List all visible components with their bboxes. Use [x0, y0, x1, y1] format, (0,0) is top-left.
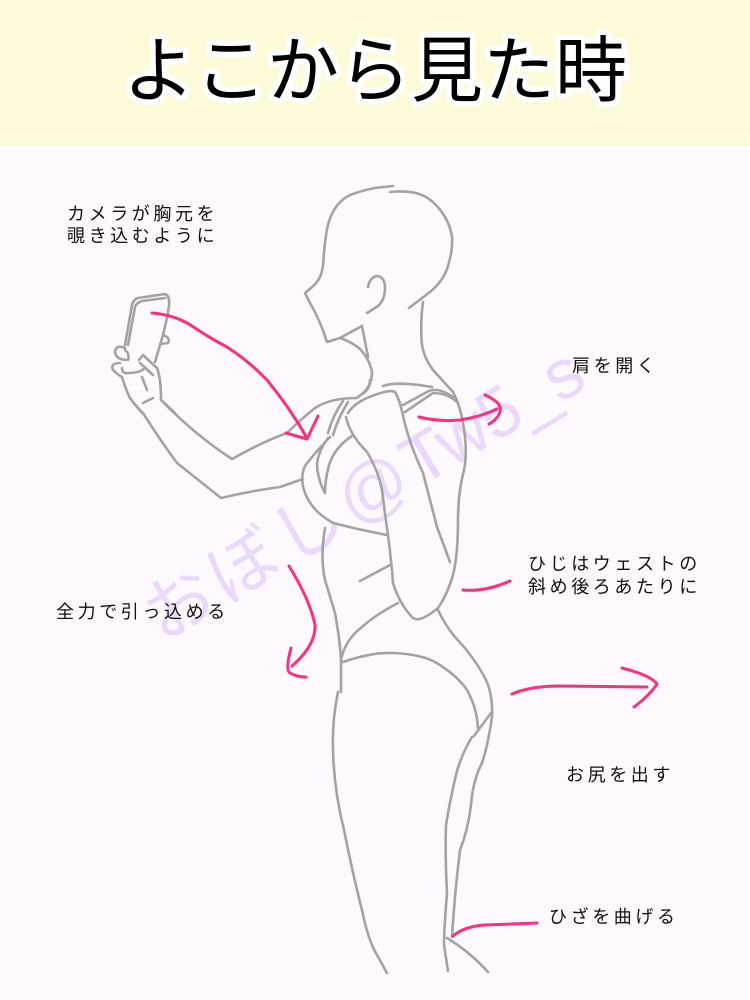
watermark: おぼし@Tw5_s — [129, 332, 596, 656]
label: elbow — [528, 554, 701, 597]
head and face — [305, 186, 393, 342]
back — [438, 392, 466, 608]
arrow: shoulder — [419, 395, 500, 424]
label: elbow: 斜め後ろあたりに — [528, 577, 701, 597]
title: よこから見た時 — [123, 32, 627, 112]
label: belly: 全力で引っ込める — [56, 602, 229, 622]
arrow: belly — [288, 566, 315, 677]
raised arm — [161, 398, 357, 459]
label: elbow: ひじはウェストの — [528, 554, 701, 574]
arrow: phone to chest — [152, 313, 318, 439]
figure: side view line drawing — [112, 186, 492, 973]
label: camera: カメラが胸元を — [67, 204, 218, 224]
label: camera — [67, 204, 218, 246]
arrow: knee — [453, 923, 537, 936]
buttock and rear leg — [438, 610, 492, 937]
label: camera: 覗き込むように — [67, 226, 218, 246]
chest and straps — [328, 401, 343, 433]
arrow: hips — [512, 668, 657, 707]
label: hips: お尻を出す — [566, 765, 674, 785]
title banner — [0, 0, 750, 146]
label: knee: ひざを曲げる — [549, 906, 679, 927]
front leg — [333, 692, 387, 973]
hand and phone — [125, 294, 169, 362]
neck — [362, 326, 368, 357]
torso and hips — [322, 528, 341, 692]
arrow: elbow — [463, 581, 510, 590]
label: shoulder: 肩を開く — [572, 356, 658, 376]
arm behind back — [348, 391, 450, 562]
ear — [367, 276, 385, 313]
